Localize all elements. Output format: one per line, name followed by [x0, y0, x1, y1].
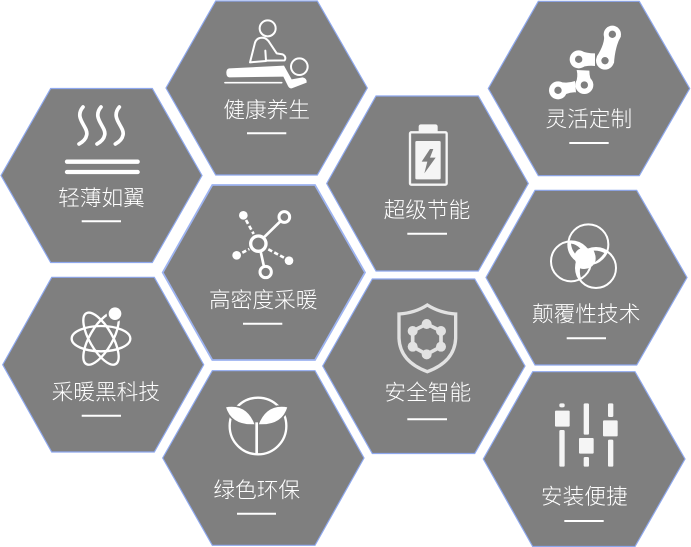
label: 绿色环保 [213, 478, 300, 502]
panel: 安装便捷 [483, 372, 685, 546]
label: 超级节能 [384, 198, 470, 222]
label: 高密度采暖 [209, 288, 317, 312]
label: 安全智能 [384, 380, 471, 405]
panel: 采暖黑科技 [3, 277, 204, 452]
icon: chain links [549, 26, 621, 99]
icon: sprout [225, 398, 288, 454]
icon: sliders [555, 403, 618, 467]
panel: 健康养生 [166, 1, 367, 175]
icon: atom [72, 305, 130, 370]
panel: 高密度采暖 [163, 185, 365, 360]
label: 健康养生 [223, 98, 310, 122]
panel: 颠覆性技术 [486, 190, 687, 365]
icon: battery [410, 124, 447, 185]
label: 颠覆性技术 [532, 302, 640, 326]
panel: 安全智能 [323, 279, 525, 454]
icon: shield [399, 305, 456, 372]
label: 灵活定制 [545, 106, 632, 132]
icon: network nodes [232, 211, 293, 278]
icon: heat waves [67, 107, 138, 172]
icon: overlapping circles [551, 224, 616, 288]
icon: massage [225, 20, 308, 88]
panel: 轻薄如翼 [1, 88, 202, 262]
panel: 超级节能 [327, 96, 528, 271]
label: 轻薄如翼 [58, 186, 145, 210]
panel: 绿色环保 [163, 371, 364, 545]
label: 采暖黑科技 [52, 380, 160, 404]
label: 安装便捷 [541, 484, 628, 509]
panel: 灵活定制 [488, 1, 690, 176]
